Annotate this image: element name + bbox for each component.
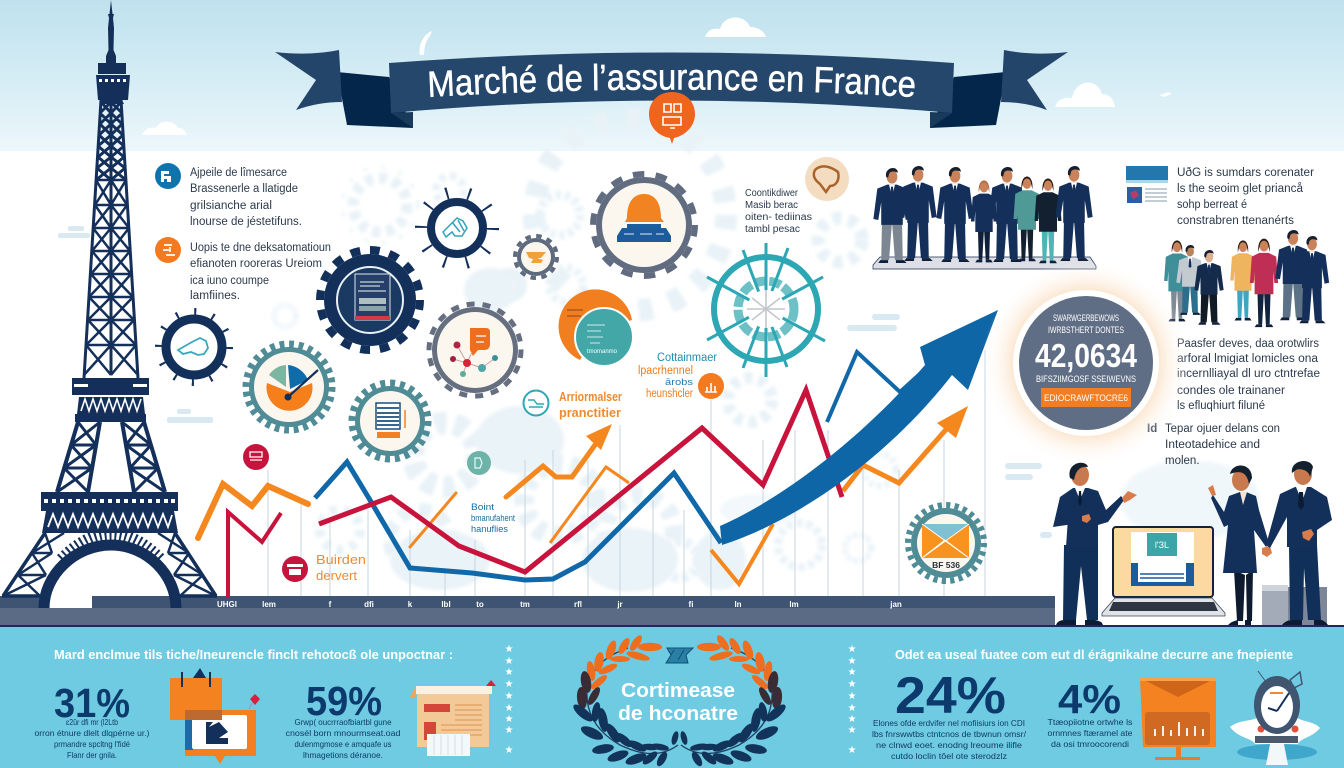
stat: 24%: cutdo loclin tôel ote sterodzlz xyxy=(891,752,1007,761)
icon: orange chart badge xyxy=(698,373,724,399)
text block: right 2: Paasfer deves, daa orotwlirs xyxy=(1177,338,1319,350)
stat circle: 42,0634 xyxy=(1035,337,1138,374)
text block: chart note: bmanufahent xyxy=(471,513,515,523)
divider stars left: ★ xyxy=(505,703,514,714)
icon: wreath emblem xyxy=(666,648,693,663)
red line left xyxy=(228,512,281,597)
text block: right 2: ls efluqhiurt filuné xyxy=(1177,400,1265,412)
blue upper line xyxy=(827,352,922,422)
chart axis labels xyxy=(217,600,902,609)
text block: chart note: Boint xyxy=(471,502,495,512)
stat: 24%: lbs fnrswwtbs ctntcnos de tbwnun omsr/ xyxy=(872,730,1027,739)
text block: right 2: incernlliayal dl uro ctntrefae xyxy=(1177,368,1320,380)
text block: orange label xyxy=(524,389,622,420)
stat: 24%: Elones ofde erdvifer nel mofiisiurs ion CDI xyxy=(873,719,1025,728)
text block: right 2: arforal lmigiat lomicles ona xyxy=(1177,353,1319,365)
chart axis labels: fi xyxy=(689,600,693,609)
text block: center top: oiten- tediinas xyxy=(745,212,812,223)
divider stars left: ★ xyxy=(505,656,514,667)
text block: right 1: constrabren ttenanérts xyxy=(1177,215,1294,227)
chart axis labels: dfi xyxy=(364,600,374,609)
gear: navy spoked top xyxy=(421,192,493,264)
gear: small grey xyxy=(515,236,557,278)
text block: top left 1: grilsianche arial xyxy=(190,200,272,212)
icon: teal wheel xyxy=(707,243,825,377)
stat circle: EDIOCRAWFTOCRE6 xyxy=(1044,393,1128,404)
presenter man right xyxy=(1266,461,1332,625)
text block: right 1: sohp berreat é xyxy=(1177,199,1247,211)
tower base arch and legs xyxy=(2,533,217,608)
stat: 24%: ne clnwd eoet. enodng lreoume ilifle xyxy=(876,741,1022,750)
banner body xyxy=(389,52,954,113)
icon: red shop badge xyxy=(282,556,308,582)
stat: 24% xyxy=(872,667,1027,761)
text block: red badge label: dervert xyxy=(316,568,357,583)
text block: center coloured: ārobs xyxy=(665,377,693,388)
text block: right 3: Tepar ojuer delans con xyxy=(1165,423,1280,435)
stat circle: SWARWGERBEWOWS xyxy=(1053,313,1119,324)
icon: orange and teal circle: tmomanmo xyxy=(587,349,618,355)
pale blobs xyxy=(390,268,1260,592)
stat: 4% xyxy=(1048,676,1133,749)
text block: top left 2: lamfiines. xyxy=(190,290,240,302)
heading: bottom right: Odet ea useal fuatee com eut dl érâgnikalne decurre ane fnepiente xyxy=(895,647,1293,662)
red main line xyxy=(319,390,842,572)
stat: 31%: ɛ2ûr dfi mr (l2Ltb xyxy=(66,718,118,727)
divider stars right: ★ xyxy=(848,725,857,736)
ground band xyxy=(0,596,1055,625)
icon: blue badge xyxy=(155,163,181,189)
divider stars right: ★ xyxy=(848,679,857,690)
chart axis labels: UHGl xyxy=(217,600,237,609)
eiffel tower xyxy=(0,0,1055,625)
text block: center top xyxy=(745,188,812,235)
banner tail left xyxy=(275,50,413,128)
text block: right 1 xyxy=(1177,167,1314,227)
icon: document xyxy=(409,680,496,756)
people group top xyxy=(873,166,1096,269)
icon: orange envelope board xyxy=(1140,678,1216,760)
banner tail right xyxy=(930,50,1068,128)
stat: 59%: dulenmgmose e amquafe us xyxy=(294,740,392,749)
orange line middle xyxy=(550,467,629,543)
people group right xyxy=(1164,230,1329,327)
icon: green badge xyxy=(467,451,491,475)
laurel wreath: Cortimease xyxy=(621,680,735,702)
chart axis labels: k xyxy=(408,600,413,609)
heading: bottom left: Mard enclmue tils tiche/Ineurencle finclt rehotocß ole unpoctnar : xyxy=(54,648,453,662)
presenter left xyxy=(1053,463,1137,625)
icon: calendar and monitor xyxy=(170,668,260,764)
chart axis labels: jr xyxy=(616,600,623,609)
stat: 59%: lhmagetions déranoe. xyxy=(303,751,383,760)
text block: center coloured: heunshcler xyxy=(646,388,693,400)
orange short line xyxy=(410,493,456,547)
text block: top left 1 xyxy=(155,163,302,228)
stat: 31%: Flanr der gnila. xyxy=(67,751,117,760)
icon: teal badge xyxy=(524,390,548,416)
icon: clock on platform xyxy=(1230,671,1320,765)
text block: orange label: Arriormalser xyxy=(559,389,622,404)
stat: 4%: da osi tmroocorendi xyxy=(1051,740,1129,749)
stat: 31% xyxy=(34,680,150,760)
line chart xyxy=(198,310,998,597)
divider stars left: ★ xyxy=(505,745,514,756)
text block: center coloured: Cottainmaer xyxy=(657,352,717,364)
text block: center top: Coontikdiwer xyxy=(745,188,799,199)
divider stars left: ★ xyxy=(505,725,514,736)
text block: red badge label: Buirden xyxy=(316,552,366,567)
divider stars right: ★ xyxy=(848,691,857,702)
gear: teal pie chart xyxy=(246,344,332,430)
gear: grey network xyxy=(429,304,521,396)
stat: 31%: orron étnure dlelt dlqpérne ur.) xyxy=(34,729,150,738)
stat: 59%: cnosél born mnourmseat.oad xyxy=(286,729,401,738)
text block: top left 1: Brassenerle a llatigde xyxy=(190,183,298,195)
pale dashes xyxy=(58,226,1052,538)
gear: navy document xyxy=(320,250,420,350)
stat: 59% xyxy=(286,678,401,760)
background pale gears xyxy=(274,119,896,578)
tower second level legs xyxy=(57,422,165,492)
text block: right 3: Id xyxy=(1147,423,1157,435)
text block: center coloured xyxy=(638,352,717,400)
chart grid lines xyxy=(268,350,985,597)
text block: right 3 xyxy=(1147,423,1280,467)
orange arrow right xyxy=(843,406,968,491)
text block: top left 2: ica iuno coumpe xyxy=(190,275,269,287)
gear: teal document xyxy=(352,383,428,459)
icon: orange balloon xyxy=(649,92,695,144)
text block: top left 1: Ajpeile de lîmesarce xyxy=(190,167,287,179)
text block: right 1: UðG is sumdars corenater xyxy=(1177,167,1314,179)
divider stars left xyxy=(505,644,514,756)
presenters and laptop xyxy=(1053,461,1332,625)
presenter woman xyxy=(1208,465,1272,625)
chart axis labels: rfl xyxy=(574,600,582,609)
text block: center coloured: lpacrhennel xyxy=(638,365,693,377)
title: Marché de l’assurance en France xyxy=(429,64,915,98)
text block: top left 2: efianoten rooreras Ureiom xyxy=(190,258,322,270)
divider stars left: ★ xyxy=(505,679,514,690)
chart axis labels: lbl xyxy=(441,600,451,609)
stat circle: IWRBSTHERT DONTES xyxy=(1048,325,1124,336)
laurel wreath: de hconatre xyxy=(618,703,738,725)
chart axis labels: to xyxy=(476,600,484,609)
text block: right 2: condes ole trainaner xyxy=(1177,385,1285,397)
text block: top left 2: Uopis te dne deksatomatioun xyxy=(190,242,331,254)
icon: info cards xyxy=(1126,166,1168,203)
divider stars right: ★ xyxy=(848,656,857,667)
text block: chart note xyxy=(467,451,515,534)
blue thin line xyxy=(315,462,721,580)
chart axis labels: jan xyxy=(889,600,902,609)
sky background xyxy=(0,0,1344,151)
stat circle: BIFSZIIMGOSF SSEIWEVNS xyxy=(1036,374,1136,385)
title banner xyxy=(275,50,1068,128)
icon: orange and teal circle xyxy=(559,289,633,366)
stat: 4%: 4% xyxy=(1058,676,1121,722)
divider stars left: ★ xyxy=(505,644,514,655)
stat: 4%: Ttæopiiotne ortwhe ls xyxy=(1048,718,1132,727)
platform xyxy=(873,257,1096,269)
tower spire and top xyxy=(96,0,130,104)
orange v line xyxy=(711,524,773,584)
divider stars right: ★ xyxy=(848,644,857,655)
laurel wreath xyxy=(571,633,788,768)
divider stars left: ★ xyxy=(505,667,514,678)
text block: chart note: hanuflies xyxy=(471,524,509,534)
orange arrow middle xyxy=(506,424,612,497)
stat: 31%: 31% xyxy=(54,680,130,726)
gear: envelope xyxy=(908,505,984,581)
divider stars right: ★ xyxy=(848,714,857,725)
stat circle xyxy=(982,259,1190,467)
stat: 59%: Grwp( oucrrraofbiartbl gune xyxy=(294,718,392,727)
chart axis labels: f xyxy=(329,600,332,609)
divider stars right: ★ xyxy=(848,703,857,714)
chart axis labels: lm xyxy=(789,600,799,609)
orange line left xyxy=(198,484,308,538)
stat: 31%: prmandre spcltng l'fidé xyxy=(54,740,130,749)
tower second platform xyxy=(72,378,149,422)
text block: red badge label xyxy=(282,552,366,583)
tower first platform xyxy=(41,492,178,533)
chart axis labels: lem xyxy=(262,600,276,609)
icon: orange badge xyxy=(155,237,181,263)
divider stars left: ★ xyxy=(505,714,514,725)
gear: large grey helmet xyxy=(593,174,695,276)
divider stars left: ★ xyxy=(505,691,514,702)
stat: 24%: 24% xyxy=(895,667,1006,725)
blue growth arrow xyxy=(720,310,998,545)
divider stars right xyxy=(848,644,857,756)
text block: top left 2 xyxy=(155,237,331,302)
tower upper shaft xyxy=(84,100,138,378)
stat: 4%: ornmnes ftæramel ate xyxy=(1048,729,1133,738)
divider stars right: ★ xyxy=(848,667,857,678)
stat: 59%: 59% xyxy=(306,678,382,724)
divider stars right: ★ xyxy=(848,745,857,756)
icon: tan medallion xyxy=(805,157,849,201)
grey box xyxy=(1262,585,1327,625)
chart axis labels: tm xyxy=(520,600,530,609)
chart axis labels: ln xyxy=(734,600,742,609)
gear: navy spoked left xyxy=(160,313,228,381)
laptop: l'ЗL xyxy=(1155,540,1169,550)
icon: red badge xyxy=(243,444,269,470)
clouds xyxy=(142,17,1172,135)
text block: orange label: pranctitier xyxy=(559,405,621,420)
bottom panel xyxy=(0,625,1344,768)
text block: center top: Masib berac xyxy=(745,200,798,211)
laptop xyxy=(1102,527,1225,616)
text block: right 1: ls the seoim glet priancå xyxy=(1177,183,1304,195)
text block: center top: tambl pesac xyxy=(745,224,800,235)
text block: top left 1: lnourse de jéstetifuns. xyxy=(190,216,302,228)
text block: right 3: Inteotadehice and xyxy=(1165,439,1260,451)
text block: right 3: molen. xyxy=(1165,455,1200,467)
gear: envelope: BF 536 xyxy=(932,560,960,570)
text block: right 2 xyxy=(1177,338,1320,412)
